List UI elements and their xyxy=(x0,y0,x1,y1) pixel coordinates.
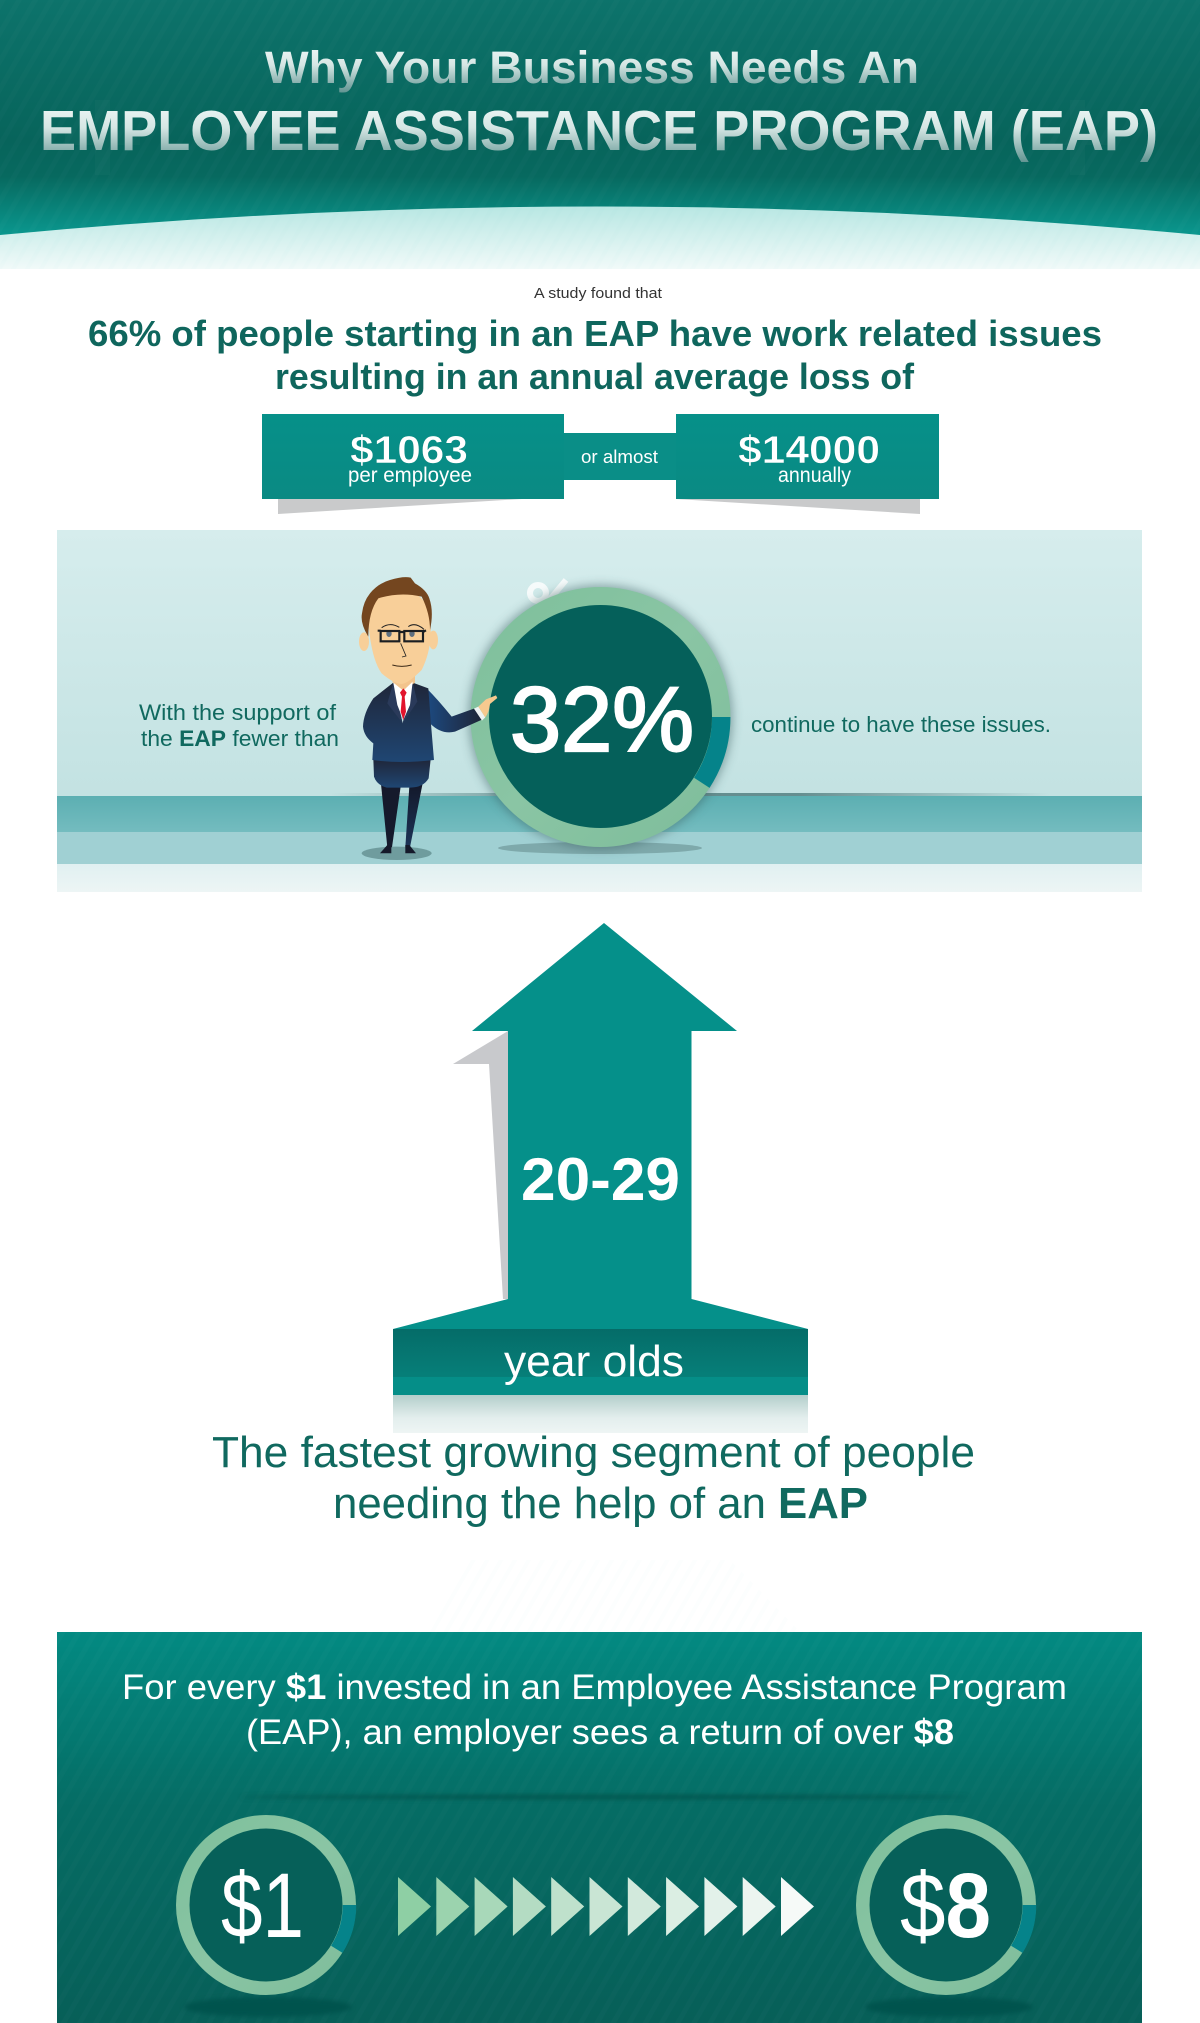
shirt cuff xyxy=(474,707,485,721)
loss boxes xyxy=(262,414,939,514)
hand xyxy=(478,695,497,717)
coin: eight dollars: $8 xyxy=(900,1855,991,1957)
panel: 32 percent xyxy=(57,530,1142,892)
pointing arm xyxy=(427,688,483,732)
circle ground shadow xyxy=(498,842,702,854)
presenter shadow xyxy=(362,847,432,860)
coin: one dollar: $1 xyxy=(221,1855,304,1957)
ROI statement: (EAP), an employer sees a return of over $8 xyxy=(246,1713,954,1752)
lapels xyxy=(387,683,403,723)
dial: 32 percent: 32% xyxy=(510,669,694,771)
headline statistic: resulting in an annual average loss of xyxy=(275,356,915,397)
hidden percent glyph behind the dial xyxy=(530,580,566,604)
title line 1: Why Your Business Needs An xyxy=(265,42,919,93)
box: per employee: per employee xyxy=(348,464,472,487)
shirt collar xyxy=(393,682,413,720)
headline statistic: 66% of people starting in an EAP have work related issues xyxy=(88,313,1102,354)
chevron arrows xyxy=(398,1877,814,1936)
trousers xyxy=(373,759,431,788)
continuing text: continue to have these issues. xyxy=(751,712,1051,737)
arrow base xyxy=(393,1329,808,1433)
box: per employee xyxy=(262,414,564,499)
legs xyxy=(381,784,401,847)
box: per employee: $1063 xyxy=(350,429,468,472)
box: annually xyxy=(676,414,939,499)
fastest growing caption: The fastest growing segment of people xyxy=(212,1428,975,1477)
eyebrows xyxy=(382,625,424,629)
neck xyxy=(392,673,415,691)
arrow base: year olds xyxy=(504,1337,684,1386)
or almost label: or almost xyxy=(581,447,658,467)
dial: 32 percent xyxy=(468,585,732,849)
head group xyxy=(359,577,438,720)
ROI statement: For every $1 invested in an Employee Assistance Program xyxy=(122,1668,1067,1707)
head xyxy=(368,590,431,684)
up arrow xyxy=(393,923,808,1433)
header light arc xyxy=(0,206,1200,269)
shoes xyxy=(380,845,391,853)
fastest growing caption xyxy=(212,1428,975,1528)
support text xyxy=(139,700,339,751)
support text: the EAP fewer than xyxy=(141,726,339,751)
headline statistic xyxy=(88,313,1102,397)
age range: 20-29 xyxy=(521,1146,680,1213)
ROI statement xyxy=(122,1668,1067,1752)
coin: eight dollars xyxy=(856,1815,1036,2017)
box: annually: annually xyxy=(778,464,851,487)
hair xyxy=(362,577,432,637)
intro text: A study found that xyxy=(534,285,663,302)
mouth xyxy=(392,665,412,666)
support text: With the support of xyxy=(139,700,337,725)
fastest growing caption: needing the help of an EAP xyxy=(333,1479,868,1528)
tie xyxy=(400,688,407,720)
title line 2: EMPLOYEE ASSISTANCE PROGRAM (EAP) xyxy=(40,99,1158,163)
panel: return on investment xyxy=(57,1632,1142,2023)
faint hatch behind lower panel xyxy=(430,1560,800,1632)
nose xyxy=(401,643,406,657)
box: annually: $14000 xyxy=(738,429,880,472)
arrow shadow xyxy=(453,1031,508,1299)
character: presenter xyxy=(359,577,497,860)
box: connector xyxy=(564,433,676,480)
divider shadow xyxy=(240,1795,970,1799)
coin: one dollar xyxy=(176,1815,356,2017)
ears xyxy=(359,632,369,651)
arrow body xyxy=(393,923,808,1329)
jacket xyxy=(363,683,434,762)
box shadows xyxy=(278,499,920,514)
header banner xyxy=(0,0,1200,269)
eyes xyxy=(386,630,392,637)
glasses xyxy=(378,630,426,641)
